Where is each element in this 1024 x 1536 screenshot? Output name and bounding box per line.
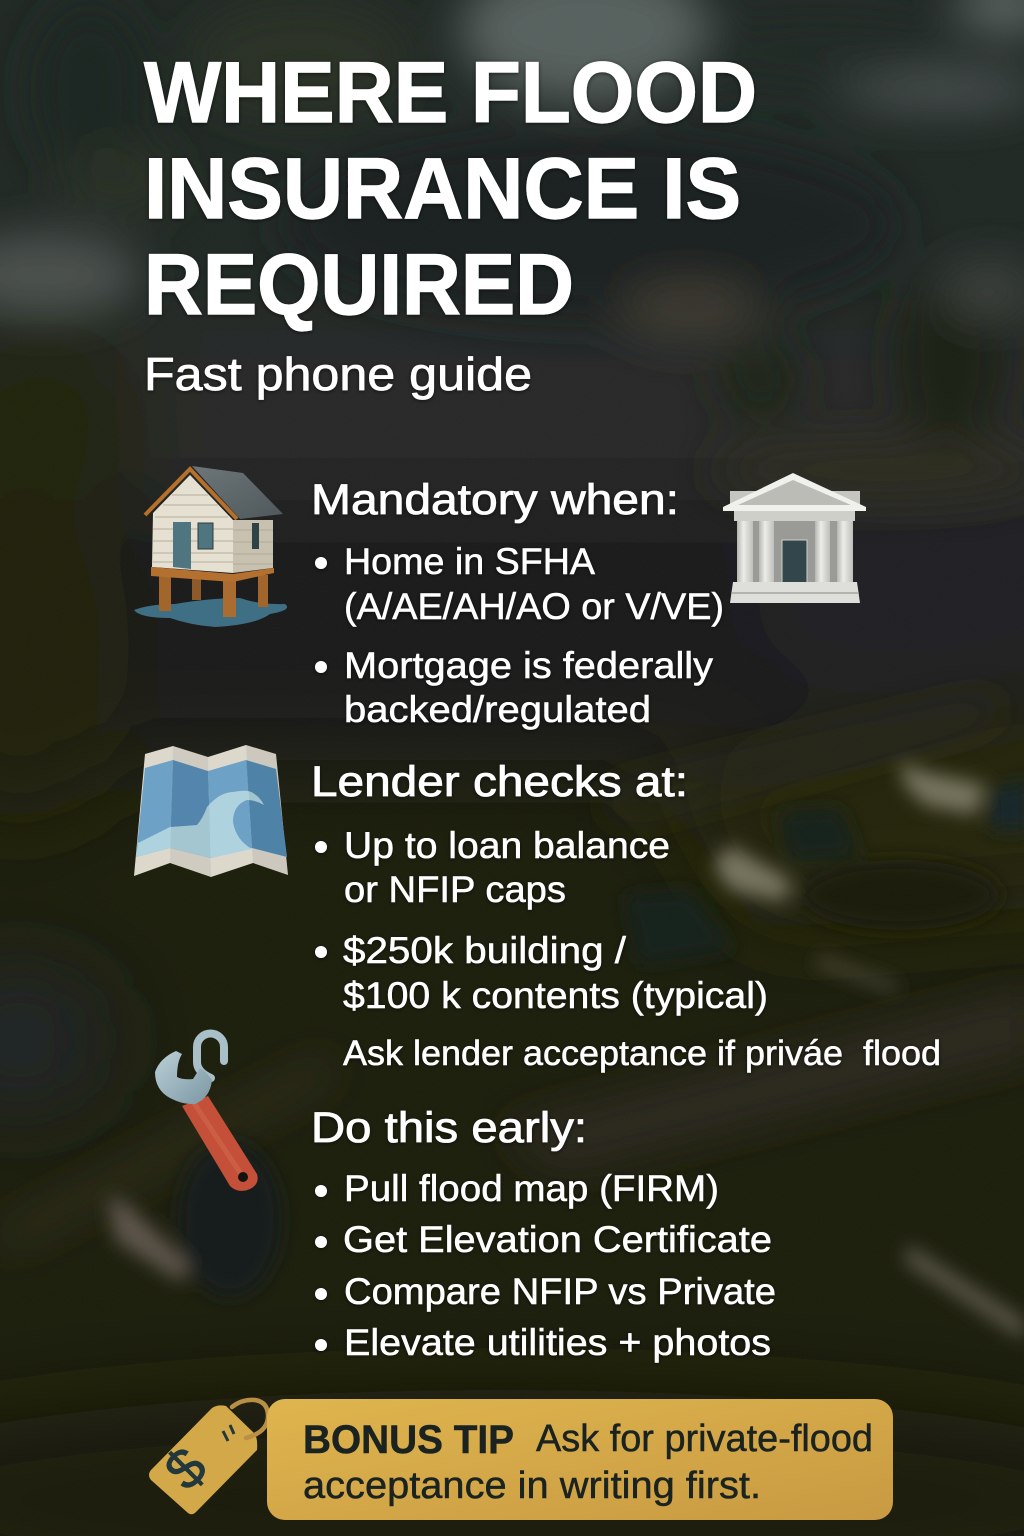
heading: lender checks at: Lender checks at: xyxy=(311,758,688,806)
bullets: mandatory conditions: (A/AE/AH/AO or V/VE) xyxy=(344,586,724,627)
bullets: early actions: Compare NFIP vs Private xyxy=(344,1271,776,1312)
bullets: early actions xyxy=(315,1168,776,1363)
bullets: lender coverage: or NFIP caps xyxy=(344,869,566,910)
icon: house on stilts xyxy=(134,466,287,627)
bullets: lender coverage: Up to loan balance xyxy=(344,825,670,866)
icon: wrench with hook xyxy=(155,1034,258,1191)
subtitle: Fast phone guide xyxy=(144,348,532,400)
title: WHERE FLOOD xyxy=(144,45,757,141)
title xyxy=(144,45,757,333)
bullets: mandatory conditions: Home in SFHA xyxy=(344,541,595,582)
section: lender checks xyxy=(311,758,941,1073)
section: do this early xyxy=(311,1104,776,1363)
callout: bonus tip: acceptance in writing first. xyxy=(303,1465,761,1507)
heading: do this early: Do this early: xyxy=(311,1104,587,1152)
bullets: lender coverage: $100 k contents (typical) xyxy=(343,975,768,1016)
icon: folded flood map xyxy=(134,745,288,877)
title: REQUIRED xyxy=(144,237,574,333)
callout: bonus tip xyxy=(267,1399,893,1520)
bullets: lender coverage: $250k building / xyxy=(343,930,627,971)
bullets: early actions: Get Elevation Certificate xyxy=(343,1219,772,1260)
bullets: mandatory conditions: Mortgage is federally xyxy=(344,645,714,686)
callout: bonus tip: BONUS TIP xyxy=(303,1418,514,1462)
icon: price tag: $ xyxy=(152,1435,219,1502)
title: INSURANCE IS xyxy=(144,141,741,237)
heading: mandatory when: Mandatory when: xyxy=(311,476,679,524)
note: private flood: Ask lender acceptance if priváe flood xyxy=(343,1034,941,1073)
bullets: early actions: Pull flood map (FIRM) xyxy=(344,1168,719,1209)
bullets: mandatory conditions: backed/regulated xyxy=(344,689,651,730)
bullets: lender coverage xyxy=(315,825,768,1016)
section: mandatory when xyxy=(311,476,724,730)
callout: bonus tip: Ask for private-flood xyxy=(536,1418,873,1460)
bullets: mandatory conditions xyxy=(315,541,724,730)
icon: price tag xyxy=(149,1400,268,1514)
icon: bank building xyxy=(723,473,866,603)
bullets: early actions: Elevate utilities + photos xyxy=(344,1322,771,1363)
